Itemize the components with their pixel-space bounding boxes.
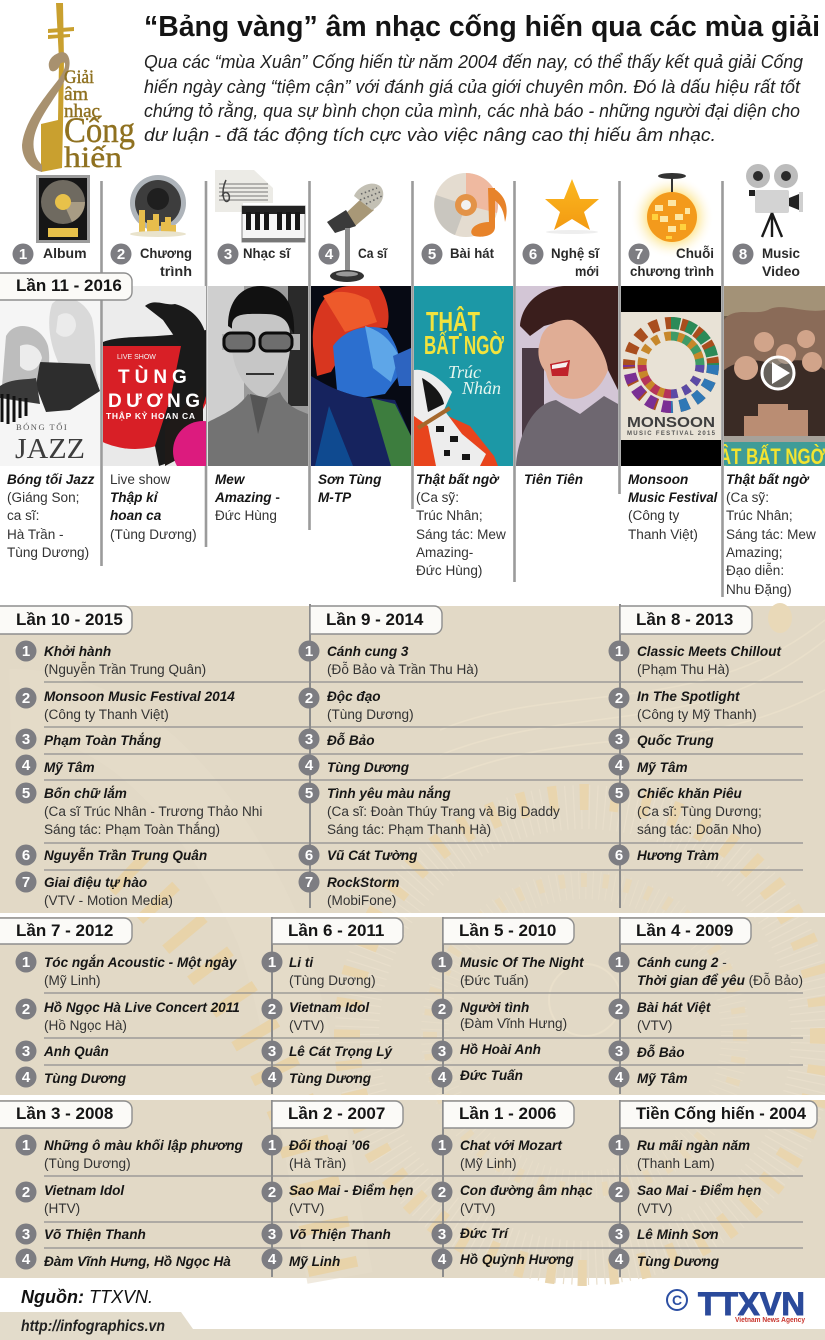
category labels row: trình [160,263,192,279]
logo: Giải âm nhạc Cống hiến: âm [64,84,88,105]
winners: edition 2: (VTV) [289,1201,324,1216]
badges: 2 [22,1184,30,1201]
photo: Monsoon festival: MONSOON [627,414,715,431]
winners: edition 5: Hồ Hoài Anh [460,1042,541,1057]
winners: edition 1: Con đường âm nhạc [460,1183,593,1198]
winners: edition 7: (Mỹ Linh) [44,973,101,988]
category labels row: 6 [529,246,537,263]
source credit: Nguồn: TTXVN. [21,1287,153,1307]
badges: 2 [615,1184,623,1201]
badges: 4 [438,1251,447,1268]
captions for edition 11: ca sĩ: [7,508,39,523]
badges: 6 [22,847,30,864]
tab: Lần 11 - 2016 [0,273,132,300]
winners: edition 10: (Ca sĩ Trúc Nhân - Trương Thảo Nhi [44,804,262,819]
winners: edition 1 [460,1138,593,1267]
tab: Lần 3 - 2008 [0,1101,132,1128]
badges: 6 [305,847,313,864]
winners: edition 5: (Đàm Vĩnh Hưng) [460,1016,567,1031]
captions for edition 11: Sơn Tùng [318,472,382,487]
badges: 5 [22,785,30,802]
captions for edition 11: Monsoon [628,472,688,487]
badges: 2 [22,1001,30,1018]
badges: 4 [615,1251,624,1268]
icon: CD with music note [434,173,507,237]
winners: edition 3: Những ô màu khối lập phương [44,1138,243,1153]
category labels row: Chương [140,245,192,261]
badges: 3 [438,1226,446,1243]
winners: edition 8: (Ca sĩ: Tùng Dương; [637,804,762,819]
winners: edition 10: Giai điệu tự hào [44,875,147,890]
logo: Giải âm nhạc Cống hiến: Giải [64,67,94,88]
winners: edition 3: Võ Thiện Thanh [44,1227,146,1242]
badges: 3 [615,731,623,748]
tab: Tiền Cống hiến - 2004 [620,1101,817,1128]
badges: 2 [615,1001,623,1018]
photo: Tùng Dương live show poster: LIVE SHOW [117,354,156,361]
badges: 4 [305,757,314,774]
winners: edition 8: Hương Tràm [637,848,719,863]
badges: 2 [615,690,623,707]
photo: Monsoon festival: MUSIC FESTIVAL 2015 [627,431,716,437]
badges: 3 [615,1226,623,1243]
winners: edition 3: (HTV) [44,1201,80,1216]
badges: 3 [438,1043,446,1060]
winners: edition 2: Mỹ Linh [289,1254,340,1269]
category labels row: 8 [739,246,747,263]
winners: edition 3: Vietnam Idol [44,1183,125,1198]
photo: Tùng Dương live show poster: DƯƠNG [108,391,200,412]
photo: Thật bất ngờ album cover [414,286,513,466]
captions for edition 11: Amazing - [214,490,280,505]
captions for edition 11: hoan ca [110,508,162,523]
winners: edition 9: Độc đạo [327,689,381,704]
winners: edition 1: Chat với Mozart [460,1138,563,1153]
winners: edition 10: Nguyễn Trần Trung Quân [44,847,207,863]
badges: 4 [22,1069,31,1086]
winners: edition 7: Hồ Ngọc Hà Live Concert 2011 [44,1000,240,1015]
badges [16,640,630,892]
winners: edition 8: Classic Meets Chillout [637,644,782,659]
photo: Tùng Dương live show poster: TÙNG [118,366,192,388]
badges: 4 [268,1251,277,1268]
intro paragraph [144,51,804,145]
title: “Bảng vàng” âm nhạc cống hiến qua các mùa giải [144,11,820,43]
badges: 4 [615,757,624,774]
winners: edition 4: (VTV) [637,1018,672,1033]
winners: edition 9: Vũ Cát Tường [327,848,418,863]
winners: edition 5: Music Of The Night [460,955,585,970]
logo: TTXVN: Vietnam News Agency [735,1317,805,1324]
badges: 2 [268,1184,276,1201]
captions for edition 11: Amazing; [726,545,783,560]
category labels row: 3 [224,246,232,263]
website url: http://infographics.vn [21,1318,165,1335]
winners: edition 3: Đàm Vĩnh Hưng, Hồ Ngọc Hà [44,1254,231,1269]
captions for edition 11: (Công ty [628,508,679,523]
logo: Giải âm nhạc Cống hiến [22,3,135,174]
category labels row: 1 [19,246,27,263]
winners: edition 2: Sao Mai - Điểm hẹn [289,1183,413,1198]
category labels row: 7 [635,246,643,263]
captions for edition 11: (Ca sỹ: [416,490,459,505]
photo: Thật bất ngờ album cover: THẬT [426,306,480,337]
winners: edition 4: Đỗ Bảo [637,1044,684,1060]
badges: 1 [615,643,623,660]
category labels row: 2 [117,246,125,263]
tab: Lần 3 - 2008: Lần 3 - 2008 [16,1104,113,1123]
badges: 3 [305,731,313,748]
category labels row: Music [762,245,800,261]
winners: edition 1: (Mỹ Linh) [460,1156,517,1171]
tab: Lần 2 - 2007: Lần 2 - 2007 [288,1104,385,1123]
captions for edition 11: M-TP [318,490,352,505]
winners: edition 8: In The Spotlight [637,689,741,704]
photo: Bóng tối Jazz poster: JAZZ [15,434,85,465]
captions for edition 11: Đức Hùng [215,508,277,523]
category labels row: chương trình [630,263,714,279]
icon: speaker with equalizer [130,175,186,237]
winners: edition 9: (MobiFone) [327,893,396,908]
captions for edition 11: (Tùng Dương) [110,527,197,542]
winners: pre-award 2004 [637,1138,761,1269]
badges: 4 [438,1069,447,1086]
tab: Lần 10 - 2015 [0,606,132,634]
winners: edition 6: Vietnam Idol [289,1000,370,1015]
badges: 1 [22,954,30,971]
tab: Tiền Cống hiến - 2004: Tiền Cống hiến - 2004 [636,1104,807,1123]
tab: Lần 10 - 2015: Lần 10 - 2015 [16,610,123,629]
icon: film projector [746,164,803,237]
badges: 4 [22,1251,31,1268]
captions for edition 11: Trúc Nhân; [726,508,793,523]
captions for edition 11 [7,472,816,597]
tab: Lần 9 - 2014: Lần 9 - 2014 [326,610,424,629]
captions for edition 11: Đức Hùng) [416,563,482,578]
winners: edition 8: Quốc Trung [637,733,714,748]
badges: 7 [22,874,30,891]
winners: edition 8: sáng tác: Doãn Nho) [637,822,761,837]
winners: edition 1: Đức Trí [460,1226,510,1241]
winners: edition 3 [44,1138,243,1269]
winners: edition 10: Khởi hành [44,644,111,659]
winners: edition 9: (Ca sĩ: Đoàn Thúy Trang và Big Daddy [327,804,560,819]
winners: edition 9: Tình yêu màu nắng [327,784,451,801]
category labels row: Ca sĩ [358,245,388,261]
winners: edition 10: (VTV - Motion Media) [44,893,173,908]
winners: edition 6: (VTV) [289,1018,324,1033]
winners: edition 2: Đối thoại ’06 [289,1138,370,1153]
winners: edition 9: (Đỗ Bảo và Trần Thu Hà) [327,661,478,677]
category labels row: 4 [325,246,334,263]
badges: 2 [268,1001,276,1018]
winners: edition 8: (Công ty Mỹ Thanh) [637,707,757,722]
captions for edition 11: Live show [110,472,170,487]
white gaps between panel rows [0,913,825,1100]
badges: 1 [22,643,30,660]
winners: edition 8 [637,644,782,863]
photo: Thật bất ngờ album cover: Trúc [448,362,481,382]
captions for edition 11: Trúc Nhân; [416,508,483,523]
captions for edition 11: Thật bất ngờ [416,472,500,487]
category labels row: mới [575,263,599,279]
tab: Lần 8 - 2013: Lần 8 - 2013 [636,610,733,629]
captions for edition 11: Music Festival [628,490,718,505]
tab: Lần 9 - 2014 [310,606,442,634]
winners: edition 4: Cánh cung 2 - [637,955,727,970]
badges: 3 [22,1043,30,1060]
badges: 4 [268,1069,277,1086]
logo: TTXVN: C [672,1292,682,1308]
panel: editions 7, 6, 5, 4 [0,917,803,1094]
intro paragraph: Qua các “mùa Xuân” Cống hiến từ năm 2004 đến nay, có thể thấy kết quả giải Cống [144,51,804,72]
badges: 1 [615,954,623,971]
tab: Lần 7 - 2012: Lần 7 - 2012 [16,921,113,940]
photo: music video group with play button [719,286,825,469]
winners: edition 1: Hồ Quỳnh Hương [460,1252,574,1267]
logo: Giải âm nhạc Cống hiến: nhạc [64,101,100,122]
badges: 4 [22,757,31,774]
winners: edition 7: Anh Quân [43,1044,109,1059]
tab: Lần 4 - 2009 [620,918,751,944]
badges: 6 [615,847,623,864]
photo: Bóng tối Jazz poster: BÓNG TỐI [16,422,68,432]
winners: edition 10: Monsoon Music Festival 2014 [44,689,235,704]
captions for edition 11: Sáng tác: Mew [416,527,506,542]
icon: disco ball [630,173,714,259]
badges: 1 [22,1137,30,1154]
captions for edition 11: (Giáng Son; [7,490,79,505]
captions for edition 11: Sáng tác: Mew [726,527,816,542]
captions for edition 11: Thật bất ngờ [726,472,810,487]
badges: 2 [438,1184,446,1201]
winners: edition 8: Mỹ Tâm [637,760,688,775]
captions for edition 11: (Ca sỹ: [726,490,769,505]
badges: 2 [22,690,30,707]
panel: beige background with piano spiral decoration [0,603,825,1278]
category labels row: Bài hát [450,245,494,261]
photo: Tùng Dương live show poster: THẬP KỶ HOAN CA [106,410,196,421]
winners: edition 7: Tùng Dương [44,1071,127,1086]
tab: Lần 5 - 2010: Lần 5 - 2010 [459,921,556,940]
badges: 1 [438,954,446,971]
category labels row: 5 [428,246,436,263]
badges: 5 [615,785,623,802]
captions for edition 11: Đạo diễn: [726,562,784,578]
tab: Lần 4 - 2009: Lần 4 - 2009 [636,921,733,940]
winners: edition 9: Sáng tác: Phạm Thanh Hà) [327,822,491,837]
logo: Giải âm nhạc Cống hiến: hiến [64,141,122,174]
logo: TTXVN: TTXVN [698,1286,805,1322]
winners: edition 9: RockStorm [327,875,399,890]
winners: edition 10: Bốn chữ lắm [44,784,127,801]
photo: Thật bất ngờ album cover: Nhân [461,378,501,398]
winners: edition 9: Cánh cung 3 [327,644,409,659]
winners: edition 5: (Đức Tuấn) [460,973,529,988]
winners: edition 3: (Tùng Dương) [44,1156,131,1171]
winners: edition 10: (Công ty Thanh Việt) [44,707,169,722]
captions for edition 11: Tiên Tiên [524,472,583,487]
winners: edition 2: Võ Thiện Thanh [289,1227,391,1242]
winners: edition 6 [289,955,393,1086]
category labels row: Nhạc sĩ [243,245,291,261]
badges: 1 [268,954,276,971]
tab: Lần 5 - 2010 [443,918,574,944]
winners: edition 10: Phạm Toàn Thắng [44,731,162,748]
badges: 3 [268,1226,276,1243]
category labels row: Nghệ sĩ [551,245,600,261]
badges: 2 [438,1001,446,1018]
captions for edition 11: Hà Trần - [7,527,64,542]
winners: edition 7: (Hồ Ngọc Hà) [44,1018,127,1033]
winners: edition 6: Tùng Dương [289,1071,372,1086]
badges: 3 [615,1043,623,1060]
icon: star [545,179,599,234]
photo: Tiên Tiên portrait [516,286,618,466]
badges [16,1134,630,1270]
photo: Tùng Dương live show poster [103,286,206,466]
winners: edition 4: Mỹ Tâm [637,1071,688,1086]
winners: edition 6: (Tùng Dương) [289,973,376,988]
icon: sheet music and piano [215,170,305,242]
winners: edition 9: (Tùng Dương) [327,707,414,722]
photo: Bóng tối Jazz poster [0,300,100,466]
tab: Lần 6 - 2011: Lần 6 - 2011 [288,921,384,940]
tab: Lần 2 - 2007 [272,1101,403,1128]
intro paragraph: chứng tỏ rằng, qua sự bình chọn của mình, các nhà báo - những người đại diện cho [144,100,800,121]
footer strip [0,1312,825,1340]
winners: edition 4 [637,955,803,1086]
tab: Lần 11 - 2016: Lần 11 - 2016 [16,276,122,295]
badges: 3 [22,1226,30,1243]
icon: microphone [327,184,383,282]
winners: edition 9: Tùng Dương [327,760,410,775]
captions for edition 11: Mew [215,472,246,487]
badges: 3 [22,731,30,748]
photo: Monsoon festival [621,286,721,466]
photo: Mew Amazing portrait [208,286,308,466]
winners: edition 1: (VTV) [460,1201,495,1216]
winners: edition 8: Chiếc khăn Piêu [637,786,742,801]
winners: edition 2 [289,1138,413,1269]
captions for edition 11: Tùng Dương) [7,545,89,560]
winners: edition 4: Thời gian để yêu (Đỗ Bảo) [637,972,803,988]
winners: edition 5 [460,955,585,1083]
tab: Lần 1 - 2006: Lần 1 - 2006 [459,1104,556,1123]
photo: Sơn Tùng M-TP [311,286,411,466]
winners: edition 9 [327,644,560,908]
winners: pre-award 2004: (VTV) [637,1201,672,1216]
winners: pre-award 2004: Sao Mai - Điểm hẹn [637,1183,761,1198]
captions for edition 11: Bóng tối Jazz [7,472,95,487]
winners: edition 6: Li ti [289,955,314,970]
winners: edition 2: (Hà Trần) [289,1156,346,1171]
winners: edition 7: Tóc ngắn Acoustic - Một ngày [44,953,238,970]
badges: 4 [615,1069,624,1086]
badges: 7 [305,874,313,891]
badges: 1 [268,1137,276,1154]
winners: edition 5: Người tình [460,1000,529,1015]
winners: edition 10: (Nguyễn Trần Trung Quân) [44,661,206,677]
badges: 3 [268,1043,276,1060]
winners: edition 10 [44,644,262,908]
icon: album [36,175,90,243]
winners: pre-award 2004: Lê Minh Sơn [637,1227,718,1242]
badges: 1 [615,1137,623,1154]
winners: edition 10: Sáng tác: Phạm Toàn Thắng) [44,821,220,837]
logo: Giải âm nhạc Cống hiến: Cống [64,110,135,150]
badges: 5 [305,785,313,802]
badges: 1 [438,1137,446,1154]
captions for edition 11: Thập kỉ [110,490,159,505]
winners: edition 7 [43,953,240,1086]
captions for edition 11: Amazing- [416,545,473,560]
category labels row [12,244,800,279]
winners: pre-award 2004: (Thanh Lam) [637,1156,715,1171]
winners: pre-award 2004: Tùng Dương [637,1254,720,1269]
tab: Lần 6 - 2011 [272,918,403,944]
winners: edition 5: Đức Tuấn [460,1068,523,1083]
category labels row: Chuỗi [676,245,714,261]
panel: editions 3, 2, 1 and pre-award 2004 [0,1100,817,1277]
tab: Lần 1 - 2006 [443,1101,574,1128]
intro paragraph: dư luận - đã tác động tích cực vào việc nâng cao thị hiếu âm nhạc. [144,124,716,145]
category labels row: Video [762,263,800,279]
winners: pre-award 2004: Ru mãi ngàn năm [637,1138,750,1153]
tab: Lần 7 - 2012 [0,918,132,944]
column dividers [102,181,722,597]
winners: edition 6: Lê Cát Trọng Lý [289,1044,393,1059]
winners: edition 9: Đỗ Bảo [327,732,374,748]
badges: 2 [305,690,313,707]
category labels row: Album [43,245,87,261]
winners: edition 10: Mỹ Tâm [44,760,95,775]
intro paragraph: hiến ngày càng “tiệm cận” với đánh giá của giới chuyên môn. Đó là dấu hiệu rất tốt [144,76,801,97]
winners: edition 4: Bài hát Việt [637,1000,712,1015]
captions for edition 11: Nhu Đặng) [726,582,792,597]
panel: editions 10, 9, 8 [0,604,803,908]
tab: Lần 8 - 2013 [620,606,752,634]
captions for edition 11: Thanh Việt) [628,527,698,542]
badges: 1 [305,643,313,660]
winners: edition 8: (Phạm Thu Hà) [637,662,730,677]
badges [16,952,630,1088]
